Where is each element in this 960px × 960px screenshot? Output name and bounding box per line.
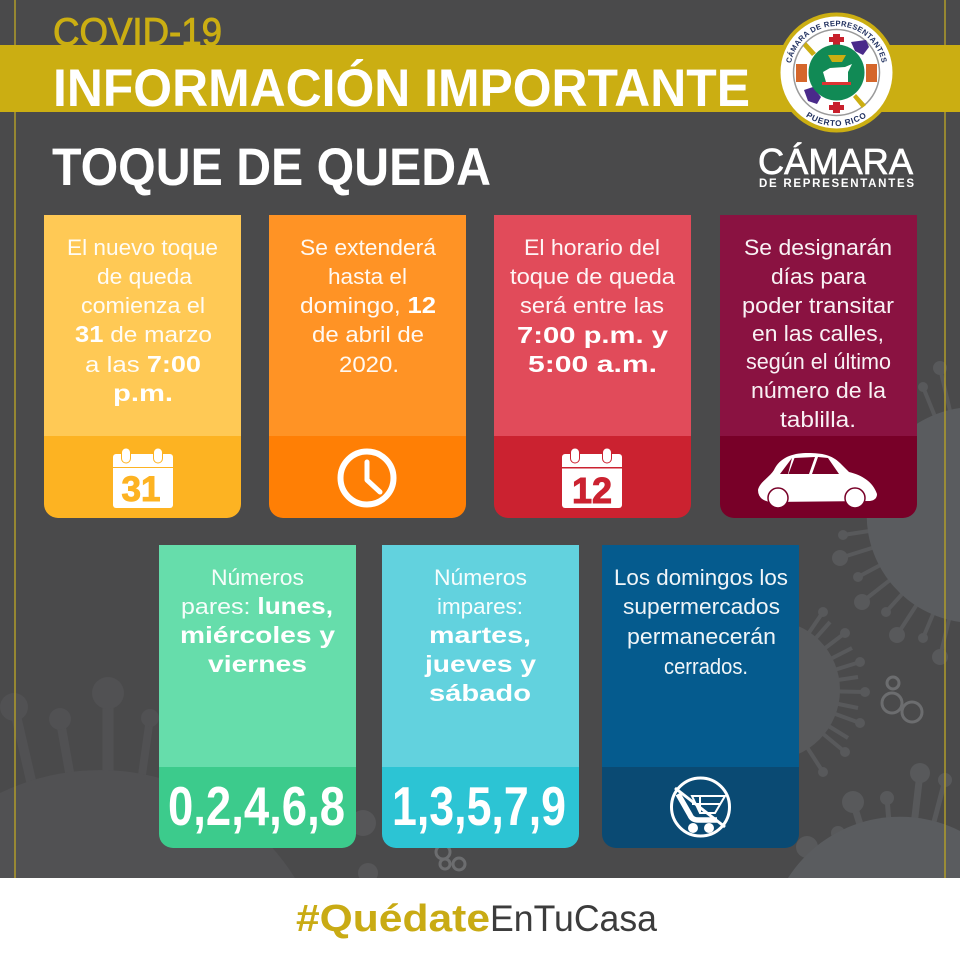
panel: fecha de extensión	[269, 215, 466, 518]
panel: supermercados	[602, 545, 799, 848]
text: impares	[424, 565, 536, 706]
text: impares: Números	[434, 565, 527, 590]
panel: inicio del toque de queda	[44, 215, 241, 518]
text: días: días para	[771, 264, 867, 289]
text: inicio: de queda	[97, 264, 193, 289]
logotype: Cámara: DE REPRESENTANTES	[759, 178, 914, 190]
icon: no shopping cart	[672, 778, 730, 836]
text: pares: miércoles y	[180, 622, 335, 648]
panel: números pares	[159, 545, 356, 848]
icon: clock	[340, 452, 394, 504]
heading: Toque de queda: TOQUE DE QUEDA	[52, 138, 491, 197]
heading: COVID-19: COVID-19	[53, 11, 222, 54]
text: supermercados	[614, 565, 788, 679]
numbers: impares: 1,3,5,7,9	[392, 775, 566, 837]
text: horario: será entre las	[520, 293, 664, 318]
panel: números impares	[382, 545, 579, 848]
text: días: en las calles,	[752, 321, 884, 346]
text: extensión: de abril de	[312, 322, 424, 347]
hashtag: #Quédate	[296, 898, 490, 940]
text: supermercados: permanecerán	[627, 624, 776, 649]
text: extensión: hasta el	[328, 264, 407, 289]
text: inicio	[67, 235, 218, 406]
text: impares: jueves y	[424, 651, 536, 677]
hashtag	[296, 898, 657, 940]
icon: car	[758, 453, 877, 508]
text: inicio: comienza el	[81, 293, 205, 318]
text: supermercados: cerrados.	[664, 654, 748, 679]
logotype: Cámara: CÁMARA	[758, 141, 913, 182]
text: horario: El horario del	[524, 235, 660, 260]
text: impares: impares:	[437, 594, 523, 619]
text: días: según el último	[746, 349, 891, 374]
text: inicio: p.m.	[113, 380, 173, 406]
text: días: Se designarán	[744, 235, 892, 260]
text: pares: viernes	[208, 651, 307, 677]
text: horario: 7:00 p.m. y	[517, 322, 668, 348]
text: horario: 5:00 a.m.	[528, 351, 657, 377]
icon: calendar 31	[113, 448, 173, 509]
background virus illustrations	[0, 361, 960, 883]
text: impares: martes,	[429, 622, 531, 648]
icon: calendar 12: 12	[572, 470, 612, 511]
text: inicio: 31 de marzo	[75, 321, 212, 347]
text: supermercados: supermercados	[623, 594, 780, 619]
gold title band	[0, 45, 960, 112]
icon: calendar 31: 31	[122, 470, 160, 509]
text: extensión	[300, 235, 437, 377]
text: extensión: domingo, 12	[300, 292, 436, 318]
seal: Cámara de Representantes: PUERTO RICO	[806, 112, 866, 126]
text: horario	[510, 235, 676, 377]
text: inicio: a las 7:00	[85, 351, 201, 377]
text: días: número de la	[751, 378, 887, 403]
hashtag: EnTuCasa	[490, 898, 657, 939]
seal: Cámara de Representantes: CÁMARA DE REPRESENTANTES	[786, 20, 887, 62]
text: extensión: Se extenderá	[300, 235, 437, 260]
numbers: pares: 0,2,4,6,8	[168, 775, 345, 837]
text: pares: Números	[211, 565, 304, 590]
panel: horario	[494, 215, 691, 518]
panel: días para transitar	[720, 215, 917, 518]
text: inicio: El nuevo toque	[67, 235, 218, 260]
text: horario: toque de queda	[510, 264, 676, 289]
text: días: poder transitar	[742, 293, 894, 318]
text: días	[742, 235, 894, 432]
seal: Cámara de Representantes	[780, 12, 892, 132]
footer band	[0, 878, 960, 960]
title: Información importante: INFORMACIÓN IMPORTANTE	[53, 58, 750, 118]
text: días: tablilla.	[780, 407, 856, 432]
text: pares	[180, 565, 335, 677]
text: pares: pares: lunes,	[181, 593, 333, 619]
icon: calendar 12	[562, 448, 622, 511]
text: supermercados: Los domingos los	[614, 565, 788, 590]
text: impares: sábado	[429, 680, 531, 706]
text: extensión: 2020.	[339, 352, 399, 377]
